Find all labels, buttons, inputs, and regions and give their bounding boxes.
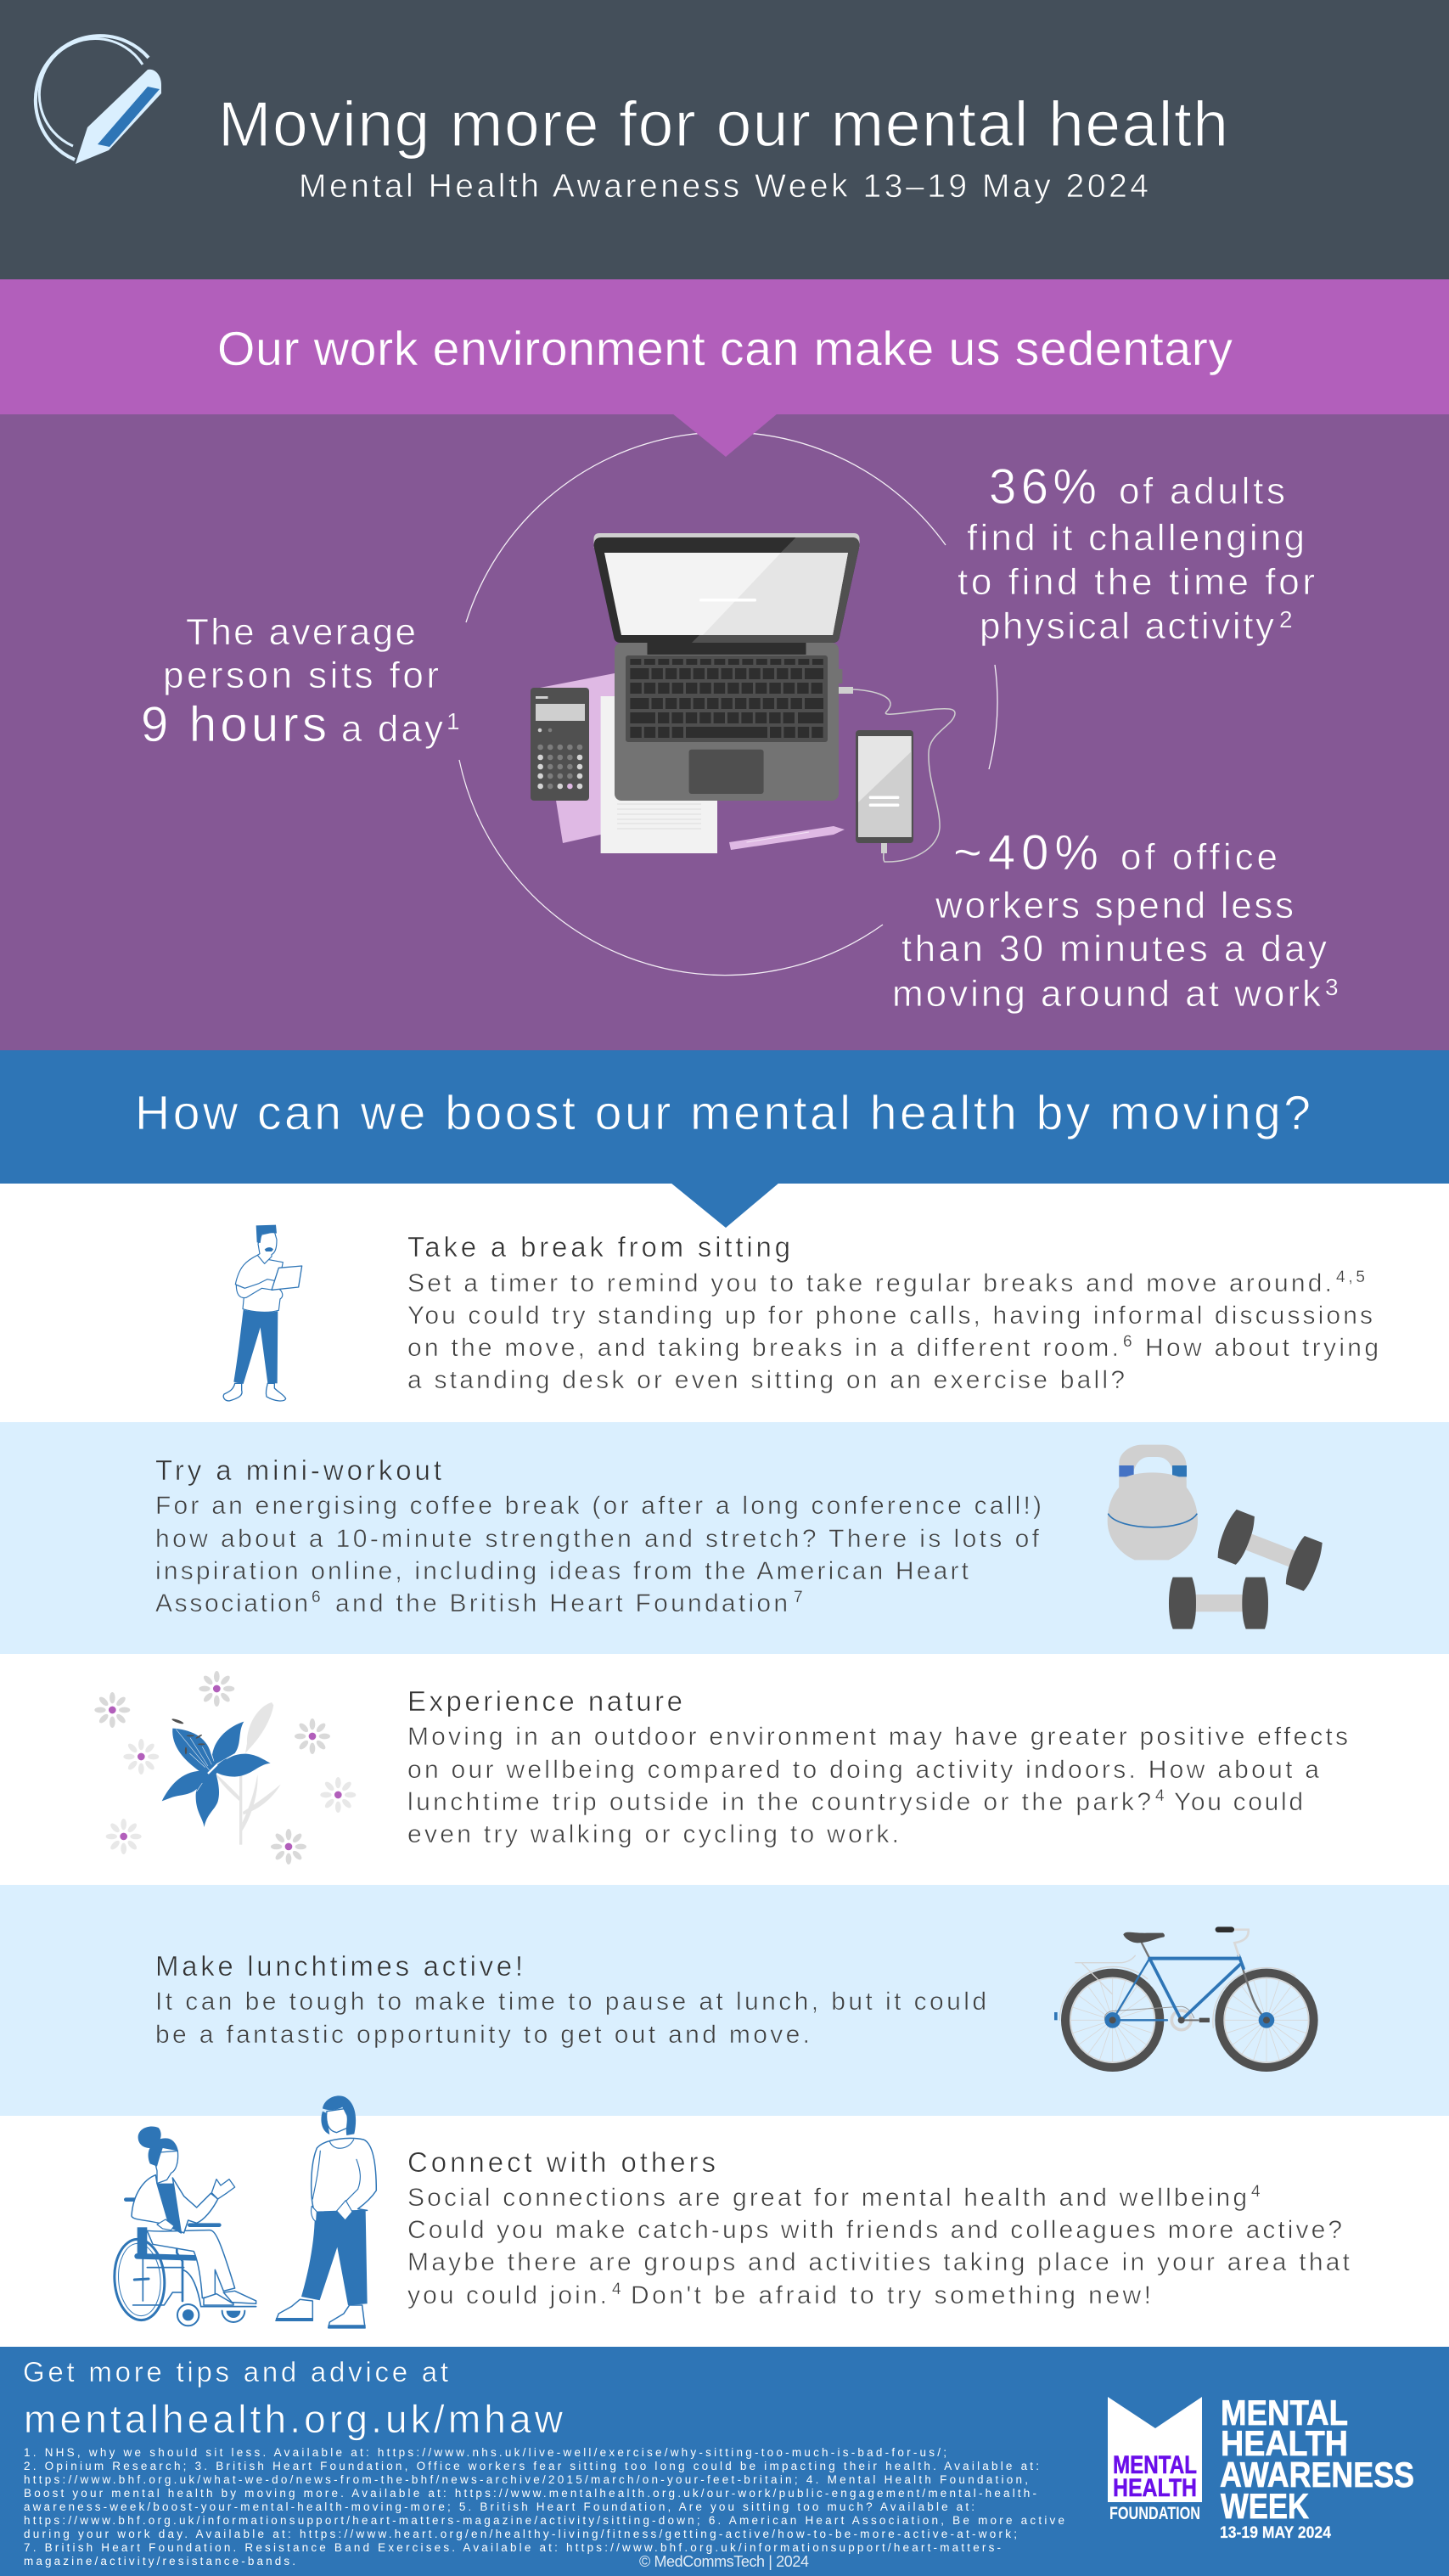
call to action: Get more tips and advice at (23, 2356, 448, 2388)
panel: footer (0, 2347, 1449, 2576)
panel: heading boost by moving (0, 1050, 1449, 1228)
text: experience nature: You could (1174, 1788, 1303, 1816)
woman in wheelchair (112, 2126, 256, 2326)
panel: connect with others (0, 2095, 1449, 2347)
stat: 36% of adults: find it challenging (967, 517, 1305, 559)
website url: mentalhealth.org.uk/mhaw (24, 2397, 564, 2441)
heading: sedentary: Our work environment can make us sedentary (217, 322, 1233, 376)
illustration: two women talking (112, 2095, 376, 2329)
text: connect: Social connections are great for mental health and wellbeing (407, 2184, 1247, 2212)
stat: 36% of adults: to find the time for (958, 561, 1315, 603)
laptop (594, 533, 859, 801)
blue top (157, 2184, 184, 2233)
small daisies (94, 1671, 356, 1865)
logo: mental health awareness week: WEEK (1221, 2486, 1309, 2526)
text: take a break: 6 (1123, 1333, 1132, 1351)
references: 7. British Heart Foundation. Resistance Band Exercises. Available at: https://www.bhf.org.uk/informationsupport/heart-matters- (24, 2541, 1001, 2554)
front wheel (1219, 1973, 1314, 2067)
dumbbell: tilted (1214, 1508, 1325, 1592)
stat: sitting 9 hours: 9 hours (141, 697, 327, 752)
text: lunchtimes: It can be tough to make time to pause at lunch, but it could (155, 1988, 986, 2016)
text: connect (407, 2146, 1351, 2309)
text: mini-workout (155, 1454, 1042, 1617)
wheelchair (112, 2200, 256, 2326)
illustration: flowers (94, 1671, 356, 1865)
logo: mental health awareness week (1220, 2393, 1414, 2542)
stat: 40% of office workers: 3 (1325, 974, 1339, 1000)
frame (1113, 1955, 1244, 2020)
text: mini-workout: Try a mini-workout (155, 1454, 441, 1486)
text: lunchtimes: Make lunchtimes active! (155, 1950, 523, 1982)
text: mini-workout: 6 (312, 1589, 321, 1606)
woman standing (276, 2095, 376, 2329)
panel: experience nature (0, 1654, 1449, 1885)
stat: sitting 9 hours: 1 (446, 708, 460, 734)
text: experience nature: 4 (1155, 1787, 1165, 1805)
stat: 36% of adults: 2 (1279, 606, 1293, 633)
panel: take a break from sitting (0, 1184, 1449, 1422)
lily bloom (162, 1722, 271, 1827)
text: take a break: a standing desk or even sitting on an exercise ball? (407, 1366, 1125, 1394)
text: connect: Maybe there are groups and activities taking place in your area that (407, 2248, 1351, 2276)
logo: mental health awareness week: MENTAL (1221, 2393, 1348, 2433)
pen (729, 826, 845, 850)
references: 1. NHS, why we should sit less. Available at: https://www.nhs.uk/live-well/exercise/why-sitting-too-much-is-bad-for-us/; (24, 2446, 946, 2459)
hair (321, 2095, 356, 2135)
shoes (276, 2299, 365, 2328)
kettlebell (1108, 1445, 1198, 1560)
figure: man with laptop (223, 1225, 302, 1401)
logo: mental health awareness week: HEALTH (1221, 2423, 1348, 2463)
references: Boost your mental health by moving more. Available at: https://www.mentalhealth.org.uk/our-work/public-engagement/mental-health- (24, 2487, 1036, 2500)
hands (312, 2201, 352, 2222)
lily stem and bud (215, 1702, 281, 1845)
text: experience nature: Experience nature (407, 1685, 682, 1717)
forks and post (1142, 1943, 1266, 2020)
logo: mental health foundation: FOUNDATION (1109, 2504, 1200, 2523)
text: experience nature (407, 1685, 1348, 1848)
text: mini-workout: and the British Heart Foundation (335, 1589, 788, 1617)
saddle (1123, 1932, 1165, 1943)
stat: 36% of adults: physical activity (980, 605, 1274, 647)
panel: sedentary work environment (0, 414, 1449, 1050)
stat: sitting 9 hours: The average (186, 611, 416, 653)
stat: sitting 9 hours: a day (341, 708, 443, 750)
seated legs (147, 2230, 235, 2298)
stat: sitting 9 hours (141, 611, 460, 752)
fenders and rack (1059, 1955, 1295, 2028)
text: connect: Could you make catch-ups with friends and colleagues more active? (407, 2216, 1342, 2244)
rear wheel (1065, 1973, 1160, 2067)
text: experience nature: even try walking or cycling to work. (407, 1820, 899, 1848)
stat: 36% of adults: of adults (1119, 470, 1285, 512)
text: take a break: Take a break from sitting (407, 1231, 790, 1263)
trousers (301, 2210, 368, 2305)
panel: make lunchtimes active (0, 1885, 1449, 2116)
text: connect: 4 (612, 2281, 621, 2298)
references: https://www.bhf.org.uk/informationsupport/heart-matters-magazine/activity/sitting-down; 6. American Heart Association, Be more active (24, 2514, 1064, 2527)
text: lunchtimes (155, 1950, 986, 2049)
stat: 36% of adults: 36% (989, 459, 1097, 515)
hubs and reflector (1054, 2012, 1274, 2028)
text: take a break: on the move, and taking breaks in a different room. (407, 1334, 1119, 1362)
phone cable (853, 689, 955, 862)
logo: mental health foundation (1108, 2397, 1202, 2523)
references: during your work day. Available at: https://www.heart.org/en/healthy-living/fitness/getting-active/how-to-be-more-active-at-work; (24, 2528, 1017, 2540)
face (154, 2151, 178, 2184)
references: awareness-week/boost-your-mental-health-moving-more; 5. British Heart Foundation, Are you sitting too much? Available at: (24, 2500, 974, 2513)
face (327, 2108, 350, 2133)
sweater (312, 2138, 376, 2212)
icon: kettlebell and dumbbells (1108, 1445, 1325, 1629)
text: mini-workout: inspiration online, including ideas from the American Heart (155, 1557, 969, 1585)
dumbbell: flat (1169, 1578, 1268, 1629)
text: connect: 4 (1251, 2183, 1261, 2201)
text: mini-workout: how about a 10-minute strengthen and stretch? There is lots of (155, 1525, 1040, 1553)
references: 2. Opinium Research; 3. British Heart Foundation, Office workers fear sitting too long could be impacting their health. Available at: (24, 2460, 1039, 2472)
stat: 40% of office workers: workers spend less (935, 885, 1294, 926)
stat: 40% of office workers: moving around at work (892, 973, 1322, 1015)
stat: 40% of office workers (892, 825, 1339, 1015)
heading: boost: How can we boost our mental health by moving? (135, 1086, 1311, 1140)
shoes (204, 2291, 256, 2305)
subtitle: Mental Health Awareness Week 13–19 May 2024 (299, 168, 1149, 205)
text: mini-workout: Association (155, 1589, 308, 1617)
text: take a break: How about trying (1145, 1334, 1379, 1362)
white document (601, 696, 717, 853)
text: experience nature: lunchtime trip outside in the countryside or the park? (407, 1788, 1151, 1816)
panel: header (0, 0, 1449, 279)
chain and crank (1104, 2006, 1210, 2030)
phone (856, 730, 913, 853)
text: connect: you could join. (407, 2281, 607, 2309)
text: take a break: 4,5 (1336, 1268, 1365, 1286)
references: https://www.bhf.org.uk/what-we-do/news-from-the-bhf/news-archive/2015/march/on-your-feet-britain; 4. Mental Health Foundation, (24, 2473, 1028, 2486)
text: connect: Don't be afraid to try something new! (631, 2281, 1151, 2309)
icon: pencil in circle (36, 36, 161, 164)
references: magazine/activity/resistance-bands. (24, 2555, 295, 2568)
logo: mental health foundation: MENTAL (1113, 2451, 1197, 2479)
title: Moving more for our mental health (218, 88, 1228, 160)
stat: 36% of adults (958, 459, 1315, 647)
pink paper (540, 673, 620, 843)
text: take a break (407, 1231, 1379, 1394)
references (24, 2446, 1064, 2568)
icon: bicycle (1054, 1926, 1314, 2067)
panel: purple heading band (0, 279, 1449, 457)
text: experience nature: on our wellbeing compared to doing activity indoors. How about a (407, 1756, 1319, 1784)
stat: 40% of office workers: than 30 minutes a day (901, 928, 1327, 970)
logo: mental health awareness week: 13-19 MAY 2024 (1220, 2524, 1331, 2542)
circle arcs (459, 432, 997, 976)
stat: 40% of office workers: ~40% (953, 825, 1098, 880)
hand (211, 2179, 235, 2199)
cardigan and arm (132, 2175, 218, 2233)
illustration: laptop desk (531, 533, 955, 862)
logo: mental health foundation: HEALTH (1113, 2474, 1197, 2502)
stat: 40% of office workers: of office (1120, 836, 1278, 878)
logo: mental health awareness week: AWARENESS (1220, 2455, 1414, 2494)
text: mini-workout: For an energising coffee break (or after a long conference call!) (155, 1492, 1042, 1520)
text: lunchtimes: be a fantastic opportunity to get out and move. (155, 2021, 810, 2049)
handlebar (1216, 1926, 1249, 1955)
calculator (531, 688, 589, 801)
text: mini-workout: 7 (794, 1589, 803, 1606)
panel: try a mini-workout (0, 1422, 1449, 1654)
text: take a break: Set a timer to remind you to take regular breaks and move around. (407, 1269, 1332, 1297)
text: take a break: You could try standing up for phone calls, having informal discussions (407, 1302, 1373, 1330)
text: connect: Connect with others (407, 2146, 716, 2178)
text: experience nature: Moving in an outdoor environment may have greater positive effects (407, 1723, 1348, 1751)
hair and bun (138, 2126, 178, 2167)
copyright: © MedCommsTech | 2024 (639, 2553, 809, 2570)
stat: sitting 9 hours: person sits for (163, 655, 439, 696)
